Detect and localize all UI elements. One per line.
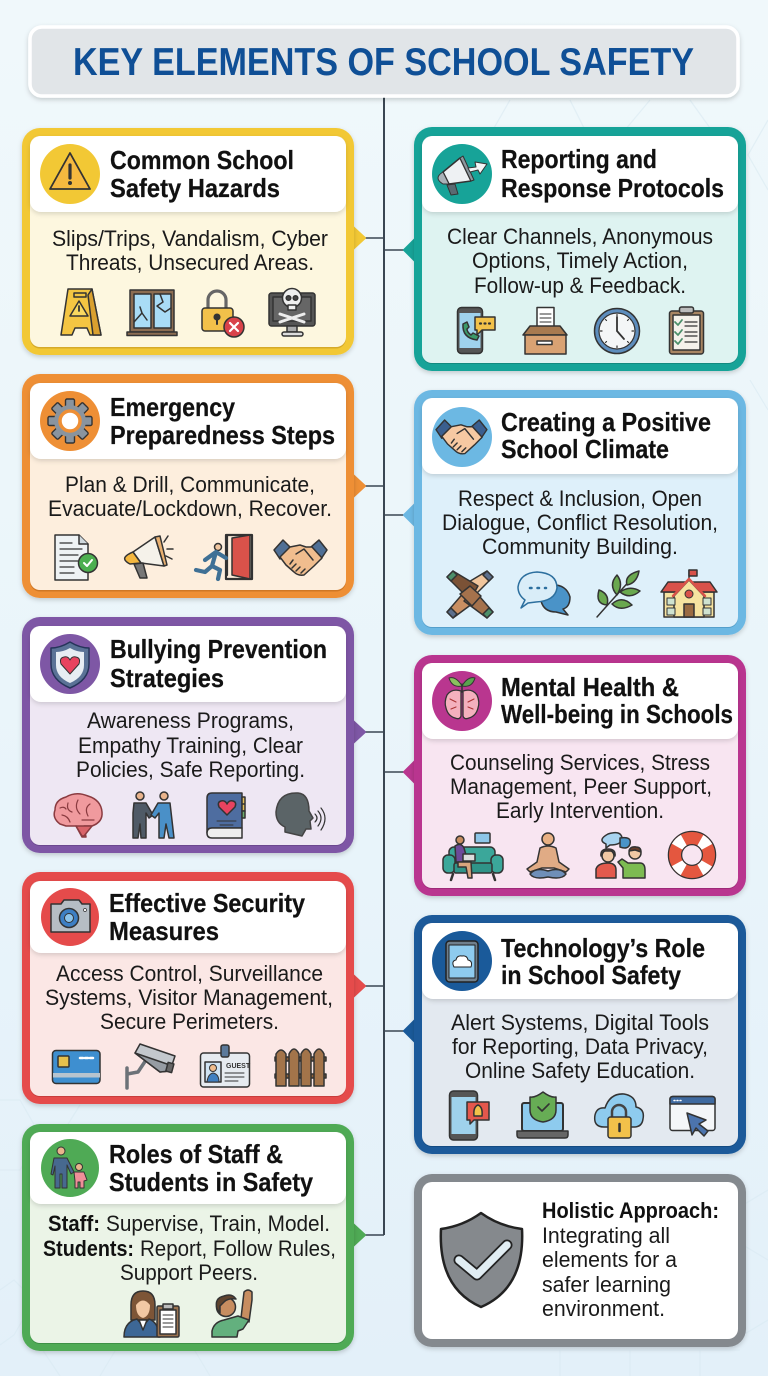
icon: surveillance camera <box>127 1044 175 1088</box>
heading: in School Safety <box>501 960 681 990</box>
body text <box>447 224 713 298</box>
body text: Dialogue, Conflict Resolution, <box>442 510 718 535</box>
heading: Strategies <box>110 663 224 693</box>
panel: roles of staff and students <box>22 1124 365 1351</box>
body text: Empathy Training, Clear <box>78 733 303 758</box>
icon: person on couch <box>443 833 503 880</box>
body text: Integrating all <box>542 1223 670 1248</box>
title: KEY ELEMENTS OF SCHOOL SAFETY <box>73 41 694 84</box>
icon: stacked hands <box>447 571 493 618</box>
body text: Awareness Programs, <box>87 708 294 733</box>
body text <box>451 1010 709 1083</box>
icon: browser window with cursor <box>670 1096 715 1136</box>
panel: effective security measures <box>22 872 365 1104</box>
body text <box>48 472 332 521</box>
body text: Follow-up & Feedback. <box>474 273 686 298</box>
icon: olive branch <box>597 571 640 617</box>
heading <box>110 634 327 693</box>
body text <box>450 750 712 823</box>
body text: Staff: <box>48 1211 100 1236</box>
icon: visitor badge: GUEST <box>226 1063 251 1070</box>
panel: bullying prevention strategies <box>22 617 365 853</box>
icon: megaphone with arrow badge <box>432 144 492 204</box>
body text: Report, Follow Rules, <box>140 1236 336 1261</box>
timeline spine <box>383 96 385 1235</box>
body text: Threats, Unsecured Areas. <box>66 250 314 275</box>
body text <box>542 1198 719 1321</box>
icon: staff member with clipboard <box>124 1291 179 1337</box>
icon: meditating person <box>527 833 569 878</box>
heading: Common School <box>110 145 294 175</box>
icon: brain with sprout badge <box>432 671 492 731</box>
body text <box>76 708 305 782</box>
panel: reporting and response protocols <box>404 127 746 371</box>
connector branches <box>364 238 405 1235</box>
icon: warning badge <box>40 144 100 204</box>
panel: mental health and well-being <box>404 655 746 896</box>
body text: Plan & Drill, Communicate, <box>65 472 315 497</box>
icon: brain <box>54 794 102 837</box>
heading <box>110 145 294 203</box>
body text: Holistic Approach: <box>542 1198 719 1223</box>
body text <box>442 486 718 559</box>
heading <box>501 407 711 464</box>
heading <box>501 672 733 729</box>
body text <box>52 226 328 275</box>
heading <box>501 144 724 203</box>
heading <box>109 888 305 946</box>
panel: creating a positive school climate <box>404 390 746 635</box>
icon: two people talking <box>596 833 645 878</box>
body text: Evacuate/Lockdown, Recover. <box>48 496 332 521</box>
heading: Measures <box>109 916 219 946</box>
body text: Clear Channels, Anonymous <box>447 224 713 249</box>
panel: holistic approach <box>414 1174 746 1347</box>
icon: laptop with shield <box>517 1092 568 1138</box>
heading: Emergency <box>110 392 235 422</box>
body text: Counseling Services, Stress <box>450 750 710 775</box>
heading <box>501 933 705 990</box>
icon: cloud with padlock <box>595 1094 643 1138</box>
icon: broken window <box>127 290 177 336</box>
body text: Slips/Trips, Vandalism, Cyber <box>52 226 328 251</box>
heading: Reporting and <box>501 144 657 174</box>
heading <box>109 1139 313 1197</box>
body text: Policies, Safe Reporting. <box>76 757 305 782</box>
icon: handshake <box>274 540 327 575</box>
icon: student raising hand <box>212 1290 252 1337</box>
icon: wet floor sign <box>61 289 101 335</box>
icon: phone with bell alert <box>450 1091 489 1140</box>
body text <box>43 1211 336 1285</box>
heading: Students in Safety <box>109 1167 313 1197</box>
body text: safer learning <box>542 1272 671 1297</box>
body text: Support Peers. <box>120 1260 258 1285</box>
icon: life ring <box>668 831 716 879</box>
heading: Creating a Positive <box>501 407 711 437</box>
heading: Bullying Prevention <box>110 634 327 664</box>
body text: Early Intervention. <box>496 798 664 823</box>
icon: school building <box>661 570 717 617</box>
body text: Supervise, Train, Model. <box>106 1211 330 1236</box>
heading: Effective Security <box>109 888 305 918</box>
body text: Online Safety Education. <box>465 1058 695 1083</box>
icon: checklist clipboard <box>670 307 704 354</box>
icon: suggestion box <box>523 308 567 354</box>
body text: Alert Systems, Digital Tools <box>451 1010 709 1035</box>
body text: Access Control, Surveillance <box>56 961 323 986</box>
icon: monitor with skull <box>269 288 315 336</box>
icon: megaphone <box>125 536 173 578</box>
icon: access card <box>52 1050 100 1084</box>
icon: speech bubbles <box>518 572 570 615</box>
icon: camera badge <box>41 888 99 946</box>
icon: speaking head <box>276 793 325 836</box>
heading: School Climate <box>501 434 669 464</box>
body text: Respect & Inclusion, Open <box>458 486 702 511</box>
icon: document with check <box>55 535 98 580</box>
heading: Mental Health & <box>501 672 679 702</box>
icon: handshake badge <box>432 407 492 467</box>
icon: clock <box>594 308 640 354</box>
icon: heart book <box>207 793 245 838</box>
body text: Options, Timely Action, <box>472 248 688 273</box>
heading: Well-being in Schools <box>501 699 733 729</box>
body text <box>45 961 333 1034</box>
heading: Technology’s Role <box>501 933 705 963</box>
icon: tablet with cloud badge <box>432 931 492 991</box>
icon: shield with check <box>441 1213 522 1307</box>
body text: Management, Peer Support, <box>450 774 712 799</box>
icon: picket fence <box>275 1049 326 1086</box>
icon: padlock with x <box>202 291 244 337</box>
icon: gear badge <box>40 391 100 451</box>
body text: Students: <box>43 1236 134 1261</box>
icon: phone with chat bubble <box>458 308 495 354</box>
icon: visitor badge <box>200 1045 251 1087</box>
icon: two people shaking hands <box>133 792 174 838</box>
heading <box>110 392 335 450</box>
body text: environment. <box>542 1296 665 1321</box>
icon: adult and child badge <box>41 1139 99 1197</box>
body text: Secure Perimeters. <box>100 1009 279 1034</box>
icon: shield with heart badge <box>40 634 100 694</box>
panel: technology's role in school safety <box>404 915 746 1154</box>
panel: emergency preparedness steps <box>22 374 365 598</box>
body text: Systems, Visitor Management, <box>45 985 333 1010</box>
heading: Safety Hazards <box>110 173 280 203</box>
title banner <box>30 27 738 96</box>
body text: Community Building. <box>482 534 678 559</box>
heading: Response Protocols <box>501 173 724 203</box>
icon: runner at exit door <box>196 535 252 579</box>
body text: elements for a <box>542 1247 678 1272</box>
heading: Preparedness Steps <box>110 420 335 450</box>
heading: Roles of Staff & <box>109 1139 283 1169</box>
body text: for Reporting, Data Privacy, <box>452 1034 708 1059</box>
panel: common school safety hazards <box>22 128 365 355</box>
